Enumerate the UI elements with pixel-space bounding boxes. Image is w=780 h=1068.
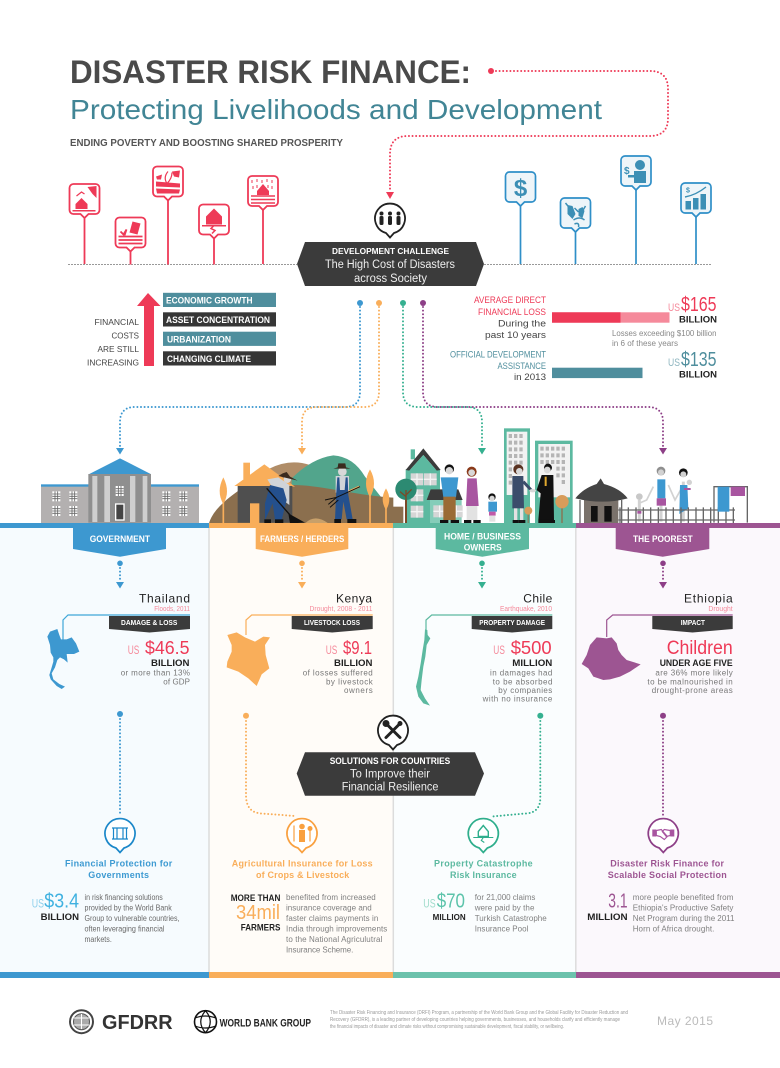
text: footer description: Recovery (GFDRR), is a leading partner of developing countries helping governments, businesses, and households clarify and efficiently manage [330,1017,620,1023]
map: Kenya [227,632,270,686]
icon: pillars pin [105,819,135,852]
farmer with pitchfork [325,463,360,523]
illustration: government building [41,458,199,523]
panel: scalable social protection: MILLION [587,912,628,923]
text: official development assistance: ASSISTANCE [498,361,546,371]
title: Protecting Livelihoods and Development [70,94,602,125]
panel: Chile case: Earthquake, 2010 [500,606,552,613]
panel: scalable social protection: Ethiopia's Productive Safety [633,904,733,913]
panel: Chile case: to be absorbed [493,677,552,686]
panel backgrounds [0,528,780,972]
panel: Chile case [416,592,553,706]
banner: development challenge: DEVELOPMENT CHALLENGE [332,246,449,256]
panel: Thailand case: BILLION [151,658,190,668]
arrow: to home and business owners [400,300,486,454]
value: 135 billion: $135 [681,349,716,371]
list: cost drivers: ASSET CONCENTRATION [166,315,270,325]
icon: people helped pin [560,198,590,264]
banner: farmers and herders [256,527,348,557]
text: financial costs are still increasing: ARE STILL [98,344,139,354]
panel: Kenya case: Drought, 2008 - 2011 [310,606,373,613]
panel: Ethiopia case: are 36% more likely [655,669,733,678]
value: 135 billion [668,349,717,380]
banner: home and business owners [436,527,529,557]
icon: rain flood pin [248,176,278,264]
icon: tree and ground pin [153,166,183,264]
note: losses exceeding: Losses exceeding $100 billion [612,329,716,338]
icon: handshake pin [648,819,678,852]
banner: development challenge: The High Cost of Disasters [325,259,455,271]
banner: solutions for countries: To Improve their [350,768,430,780]
icon: person with money pin: $ [624,166,630,177]
icon: tools speech bubble [378,716,408,750]
text: date: May 2015 [657,1014,713,1028]
panel: Kenya case: owners [344,686,373,695]
map: Thailand [47,629,79,689]
title: DISASTER RISK FINANCE: [70,54,471,90]
panel: Chile case: PROPERTY DAMAGE [479,618,545,627]
panel: agricultural insurance: Insurance Scheme. [286,946,353,955]
bottom colour band [0,972,780,978]
text: footer description: the financial impacts of disaster and climate risks without compromising sustainable development, fiscal stability, or wellbeing. [330,1024,564,1030]
panel: financial protection for governments: Group to vulnerable countries, [84,914,180,923]
icon: earthquake pin [199,204,229,264]
banner: government: GOVERNMENT [90,534,150,544]
panel: financial protection for governments: often leveraging financial [84,925,165,934]
panel: Thailand case: $46.5 [145,637,190,658]
panel: Thailand case: Thailand [139,592,190,606]
panel: Chile case: Chile [523,592,553,606]
panel: scalable social protection: more people benefited from [633,893,734,902]
panel: property catastrophe insurance: US [423,896,436,910]
logo: World Bank Group: WORLD BANK GROUP [220,1018,311,1030]
value: 135 billion: BILLION [679,370,717,380]
note: losses exceeding: in 6 of these years [612,339,678,348]
text: official development assistance [450,350,546,382]
panel: agricultural insurance [231,819,387,955]
business people [512,464,569,523]
icon: storm pin [70,184,100,264]
panel: Thailand case [47,592,190,689]
text: average direct financial loss: FINANCIAL LOSS [478,307,546,317]
text: footer description [330,1010,628,1030]
banner: home and business owners: OWNERS [464,543,502,553]
panel: Ethiopia case [582,592,733,695]
text: financial costs are still increasing: FINANCIAL [94,317,139,327]
panel: Thailand case: or more than 13% [121,669,190,678]
list: cost drivers [163,293,276,366]
panel: property catastrophe insurance: were paid by the [474,904,535,913]
icon: flood pin [116,218,146,264]
blue finance pins [506,156,711,264]
logo: GFDRR: GFDRR [102,1012,173,1034]
ground line [68,264,712,266]
panel: property catastrophe insurance: Property Catastrophe [434,859,533,869]
panel: Chile case: with no insurance [482,695,553,704]
banner: solutions for countries [297,752,484,796]
icon: growth chart pin [681,183,711,264]
text: average direct financial loss: AVERAGE DIRECT [474,295,546,305]
panel: agricultural insurance: MORE THAN [231,893,280,903]
map: Chile [416,629,430,706]
title [70,54,602,125]
banner: solutions for countries: SOLUTIONS FOR COUNTRIES [330,756,450,766]
banner: solutions for countries: Financial Resilience [342,782,438,794]
panel: Chile case: $500 [511,637,552,658]
panel: Kenya case: US [326,645,338,657]
panel: Ethiopia case: UNDER AGE FIVE [660,658,733,668]
panel: property catastrophe insurance: MILLION [433,913,466,922]
icon: dollar pin: $ [514,175,528,202]
banner: the poorest [616,527,709,557]
panel: financial protection for governments: $3.4 [44,890,79,912]
illustration: farm with two farmers [209,455,393,523]
panel: Thailand case: of GDP [163,677,190,686]
text: official development assistance: in 2013 [514,372,546,382]
text: average direct financial loss [474,295,547,340]
list: cost drivers: CHANGING CLIMATE [167,354,251,364]
panel: Kenya case: BILLION [334,658,372,668]
panel: Chile case: by companies [498,686,552,695]
panel: Kenya case: of losses suffered [303,669,373,678]
panel: scalable social protection: Disaster Risk Finance for [610,859,724,869]
panel: property catastrophe insurance: Risk Insurance [450,870,517,880]
panel: agricultural insurance: faster claims payments in [286,914,378,923]
icon: farmer pin [287,819,317,852]
panel: scalable social protection: Horn of Africa drought. [633,925,714,934]
banner: the poorest: THE POOREST [633,534,693,544]
panel: Kenya case [227,592,374,695]
value: 165 billion [668,294,717,325]
panel: financial protection for governments: markets. [84,935,112,944]
panel: Ethiopia case: drought-prone areas [652,686,733,695]
panel: Ethiopia case: IMPACT [681,618,705,627]
value: 165 billion: US [668,302,680,314]
sector colour band [0,523,780,528]
value: 135 billion: US [668,357,680,369]
panel: Thailand case: DAMAGE & LOSS [121,618,177,627]
banner: development challenge [297,242,484,286]
panel: Kenya case: by livestock [326,677,374,686]
panel: property catastrophe insurance [423,819,547,934]
farmer with shovel [264,472,305,523]
text: official development assistance: OFFICIAL DEVELOPMENT [450,350,546,360]
panel: property catastrophe insurance: for 21,000 claims [475,893,535,902]
panel: Kenya case: Kenya [336,592,372,606]
icon: people speech bubble [375,204,405,238]
arrows: dotted connectors to sectors [116,300,667,454]
banner: government [73,527,166,557]
panel: agricultural insurance: FARMERS [241,923,280,933]
panel: Kenya case: LIVESTOCK LOSS [304,618,360,627]
arrows: banners to country cases [116,560,667,588]
arrow: to the poorest [420,300,667,454]
panel: scalable social protection: 3.1 [608,890,628,912]
panel: Ethiopia case: to be malnourished in [647,677,733,686]
icon: house pin [468,819,498,852]
arrow: to farmers [298,300,382,454]
panel: agricultural insurance: of Crops & Livestock [256,870,350,880]
logo: World Bank Group [194,1011,311,1033]
list: cost drivers: ECONOMIC GROWTH [166,296,252,306]
value: 165 billion: $165 [681,294,716,316]
banner: home and business owners: HOME / BUSINESS [444,532,521,542]
panel: scalable social protection: Net Program during the 2011 [633,914,735,923]
panel: agricultural insurance: benefited from increased [286,893,376,902]
list: cost drivers: URBANIZATION [167,334,231,344]
panel: financial protection for governments: Governments [88,870,149,880]
panel: Chile case: in damages had [490,669,552,678]
arrows: country cases to solutions [117,711,666,816]
panel: agricultural insurance: insurance coverage and [286,904,372,913]
arrow: to government [116,300,363,454]
panel: agricultural insurance: to the National Agriculutral [286,935,383,944]
banner: farmers and herders: FARMERS / HERDERS [260,534,344,544]
text: footer description: The Disaster Risk Financing and Insurance (DRFI) Program, a partnership of the World Bank Group and the Global Facility for Disaster Reduction and [330,1010,628,1016]
bar chart: disaster loss versus aid [450,294,717,382]
panel: scalable social protection: Scalable Social Protection [608,870,727,880]
panel: Ethiopia case: Children [667,637,733,659]
illustration: home, family and business [390,428,573,523]
icon: person with money pin [621,156,651,264]
panel: Ethiopia case: Drought [708,606,733,613]
panel: agricultural insurance: 34mil [236,902,280,924]
arrow: dotted red connector from title [386,68,668,199]
panel: financial protection for governments: US [32,896,44,910]
text: average direct financial loss: During the [498,318,546,328]
panel: agricultural insurance: India through improvements [286,925,387,934]
value: 165 billion: BILLION [679,315,717,325]
icon: growth chart pin: $ [686,188,690,194]
panel: financial protection for governments [32,819,180,944]
logo: GFDRR [70,1010,173,1034]
panel: Thailand case: Floods, 2011 [154,606,190,613]
family [440,464,497,523]
icon: dollar pin [506,172,536,264]
panel: financial protection for governments: provided by the World Bank [84,904,173,913]
panel: scalable social protection [587,819,735,934]
panel: property catastrophe insurance: Turkish Catastrophe [475,914,547,923]
banner: development challenge: across Society [354,273,427,285]
panel: property catastrophe insurance: Insurance Pool [475,925,529,934]
text: financial costs are still increasing [87,317,139,368]
panel: Thailand case: US [128,645,140,657]
panel: Chile case: US [493,645,505,657]
panel: financial protection for governments: in risk financing solutions [84,893,163,902]
bar: loss [552,312,670,323]
text: financial costs are still increasing: INCREASING [87,358,139,368]
panel: Kenya case: $9.1 [343,637,372,658]
panel: Chile case: MILLION [512,658,552,668]
panel: property catastrophe insurance: $70 [437,890,465,912]
note: losses exceeding [612,329,716,348]
panel: Ethiopia case: Ethiopia [684,592,733,606]
panel: financial protection for governments: BILLION [41,912,79,923]
text: financial costs are still increasing: COSTS [112,330,139,340]
arrow: rising costs [137,293,160,366]
bar: aid [552,368,642,378]
map: Ethiopia [582,637,641,680]
panel: agricultural insurance: Agricultural Insurance for Loss [232,859,373,869]
illustration: hut, family and fence [575,467,747,523]
red disaster pins [70,166,278,264]
panel: financial protection for governments: Financial Protection for [65,859,173,869]
tagline: ENDING POVERTY AND BOOSTING SHARED PROSPERITY [70,137,343,149]
text: average direct financial loss: past 10 years [485,330,547,340]
